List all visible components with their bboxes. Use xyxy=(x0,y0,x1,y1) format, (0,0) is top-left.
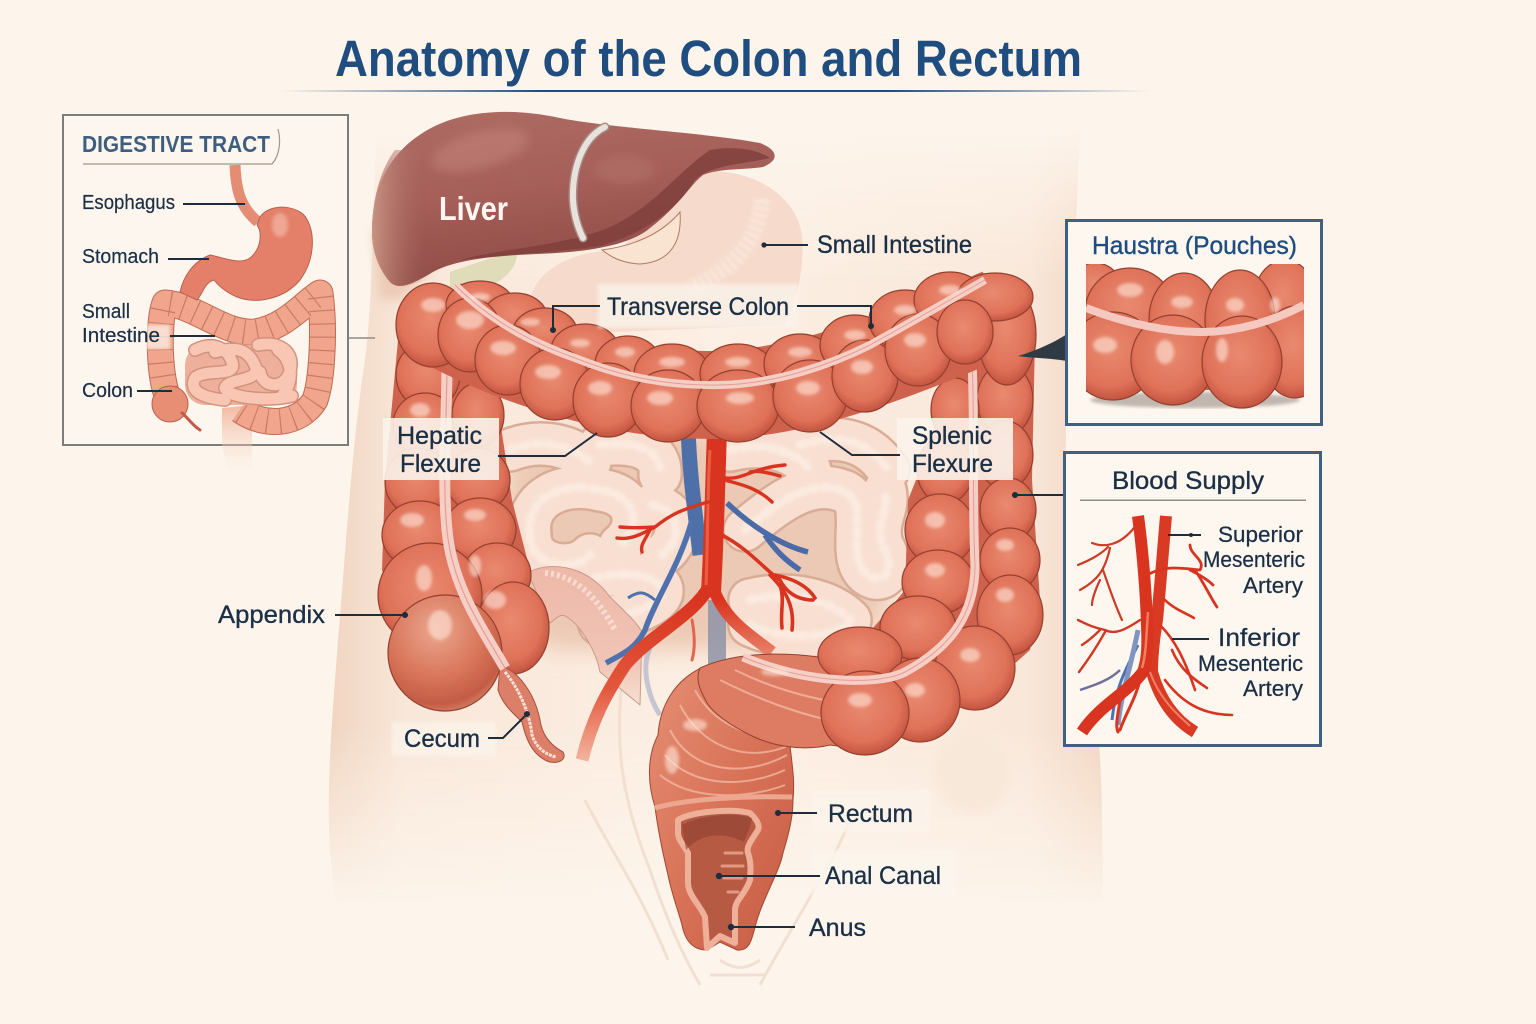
label: cecum xyxy=(392,711,530,756)
label: anus xyxy=(728,914,866,942)
lower small intestine coils xyxy=(505,430,890,650)
label: appendix: Appendix xyxy=(218,601,326,629)
label: transverse colon: Transverse Colon xyxy=(607,293,789,321)
transverse colon pouches xyxy=(396,272,1036,442)
label: inferior mesenteric artery xyxy=(1172,624,1303,701)
icon: stomach xyxy=(180,207,312,300)
label: hepatic flexure: Hepatic xyxy=(397,422,482,450)
label: inset small intestine xyxy=(82,301,215,347)
descending tube underlay xyxy=(810,340,1040,740)
label: colon: Colon xyxy=(82,380,133,402)
illustration: mesenteric arteries xyxy=(1078,516,1232,732)
label: appendix xyxy=(218,601,408,629)
label: cecum: Cecum xyxy=(404,725,480,753)
pelvic contour lines xyxy=(585,660,850,985)
label: anal canal xyxy=(716,850,957,898)
label: colon xyxy=(82,380,172,402)
illustration: haustra pouches xyxy=(1086,264,1304,409)
liver label: Liver xyxy=(439,190,508,227)
inset connector line xyxy=(348,337,375,339)
label: small intestine: Small Intestine xyxy=(817,231,972,259)
label: anus: Anus xyxy=(809,914,866,942)
liver xyxy=(372,112,775,286)
ascending colon and cecum xyxy=(378,341,549,711)
pointer to haustra xyxy=(1018,334,1067,361)
ascending tube underlay xyxy=(382,340,530,640)
appendix xyxy=(498,665,564,762)
colon highlights xyxy=(400,285,1014,774)
label: splenic flexure: Splenic xyxy=(912,422,992,450)
label: hepatic flexure: Flexure xyxy=(400,450,481,478)
icon: inset small intestine xyxy=(185,344,297,405)
heading: blood supply: Blood Supply xyxy=(1112,467,1265,495)
colon xyxy=(378,272,1043,950)
label: splenic flexure xyxy=(820,418,1013,480)
anal canal opening xyxy=(678,811,759,948)
label: superior mesenteric artery: Artery xyxy=(1243,573,1303,598)
label highlight behind intestine text xyxy=(146,325,170,349)
label: superior mesenteric artery: Superior xyxy=(1218,522,1303,547)
icon: inset colon xyxy=(152,293,322,430)
label: inferior mesenteric artery: Inferior xyxy=(1218,624,1300,652)
transverse band xyxy=(455,280,985,385)
label: inset small intestine: Intestine xyxy=(82,325,160,347)
label: splenic flexure: Flexure xyxy=(912,450,993,478)
heading: digestive tract: DIGESTIVE TRACT xyxy=(82,131,270,157)
mesenteric vessels xyxy=(582,430,815,760)
sigmoid fold xyxy=(698,654,868,750)
label: transverse colon xyxy=(550,284,874,333)
label: stomach xyxy=(82,246,209,268)
icon: esophagus xyxy=(235,165,258,222)
label: inferior mesenteric artery: Mesenteric xyxy=(1198,651,1303,676)
rectal rim xyxy=(655,797,792,808)
label: inset small intestine: Small xyxy=(82,301,130,323)
falciform ligament xyxy=(573,127,605,238)
panel: blood supply xyxy=(1064,452,1320,746)
transverse tube underlay xyxy=(440,312,1000,395)
panel: digestive tract xyxy=(63,115,348,470)
label: superior mesenteric artery xyxy=(1168,522,1305,598)
heading: haustra: Haustra (Pouches) xyxy=(1092,232,1297,260)
label: anal canal: Anal Canal xyxy=(825,862,941,890)
label: rectum: Rectum xyxy=(828,800,913,828)
label: stomach: Stomach xyxy=(82,246,159,268)
ascending band xyxy=(445,360,505,668)
descending band xyxy=(743,360,975,680)
icon: inset rectum xyxy=(222,405,252,470)
label: esophagus: Esophagus xyxy=(82,192,175,214)
upper small intestine behind liver xyxy=(528,171,803,335)
title rule xyxy=(280,90,1150,92)
label: hepatic flexure xyxy=(383,418,597,480)
lower right pale intestine xyxy=(935,733,1010,814)
descending and sigmoid pouches xyxy=(818,364,1043,755)
rectum body xyxy=(649,660,794,950)
panel: haustra xyxy=(1066,220,1329,424)
connector to blood supply xyxy=(1012,492,1064,498)
rectal striations xyxy=(660,690,790,795)
ileum tube xyxy=(528,567,642,705)
torso silhouette xyxy=(328,161,1102,878)
label: superior mesenteric artery: Mesenteric xyxy=(1203,547,1305,572)
tan shade under liver xyxy=(372,230,440,300)
gallbladder xyxy=(450,254,517,292)
title: Anatomy of the Colon and Rectum xyxy=(335,30,1082,87)
label: inferior mesenteric artery: Artery xyxy=(1243,676,1303,701)
label: rectum xyxy=(775,790,930,832)
